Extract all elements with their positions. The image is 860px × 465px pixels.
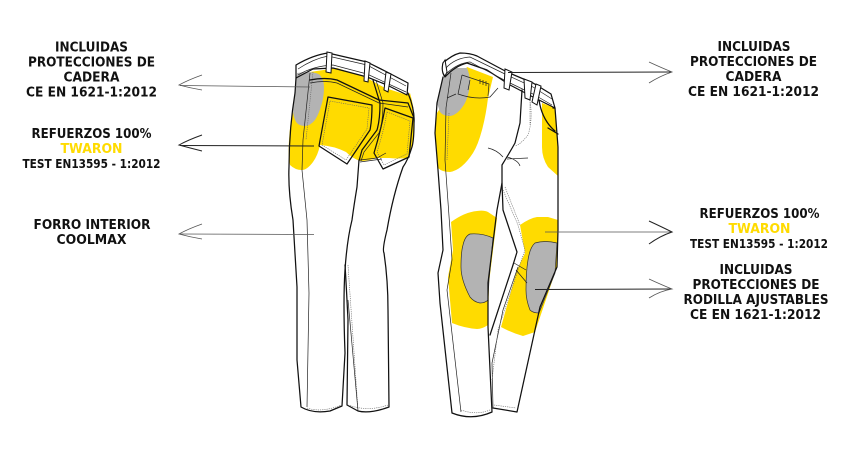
text: left hip protection	[26, 40, 157, 100]
arrow: left reinforcement callout	[179, 135, 314, 151]
front jeans silhouette	[435, 53, 558, 418]
back hip protector	[293, 72, 324, 126]
text: right hip protection: CE EN 1621-1:2012	[688, 85, 819, 100]
text: lining	[34, 218, 150, 248]
left knee yellow reinforcement	[448, 211, 497, 329]
arrow: left hip callout	[179, 75, 310, 90]
text: knee protection: CE EN 1621-1:2012	[690, 308, 821, 323]
text: lining: COOLMAX	[56, 233, 126, 248]
right knee yellow reinforcement	[501, 217, 558, 336]
text: left reinforcement: TEST EN13595 - 1:2012	[22, 157, 160, 171]
arrow: left lining callout	[179, 224, 314, 239]
gap between front legs	[488, 183, 517, 335]
text: left hip protection: CADERA	[64, 70, 120, 86]
back belt loops	[326, 52, 391, 92]
text: right hip protection	[688, 40, 819, 100]
text: right reinforcement	[690, 207, 828, 251]
front belt loops	[442, 60, 541, 105]
arrow: right reinforcement callout	[545, 221, 672, 244]
text: right hip protection: CADERA	[726, 70, 782, 85]
text: left reinforcement	[22, 127, 160, 171]
back jeans outlines	[289, 53, 414, 412]
front yellow side reinforcement	[542, 103, 558, 176]
front jeans outlines	[435, 53, 558, 417]
back yellow reinforcement	[289, 68, 414, 170]
text: knee protection: RODILLA AJUSTABLES	[684, 293, 828, 308]
arrow: right knee callout	[535, 279, 672, 298]
back view jeans	[289, 52, 414, 412]
text: left hip protection: INCLUIDAS	[55, 40, 128, 56]
text: right reinforcement: TEST EN13595 - 1:2012	[690, 237, 828, 251]
text: left hip protection: PROTECCIONES DE	[28, 56, 155, 70]
text: left reinforcement: REFUERZOS 100%	[32, 127, 152, 142]
front hip protector	[437, 68, 470, 116]
front view jeans	[435, 53, 558, 418]
text: knee protection: INCLUIDAS	[720, 263, 792, 278]
arrow: right hip callout	[508, 62, 672, 83]
right knee protector	[526, 242, 557, 313]
text: left reinforcement: TWARON	[60, 142, 122, 157]
text: right reinforcement: TWARON	[728, 222, 790, 237]
text: right reinforcement: REFUERZOS 100%	[700, 207, 820, 222]
text: right hip protection: INCLUIDAS	[718, 40, 790, 55]
text: left hip protection: CE EN 1621-1:2012	[26, 86, 157, 100]
text: right hip protection: PROTECCIONES DE	[690, 55, 817, 70]
text: knee protection: PROTECCIONES DE	[692, 278, 820, 293]
back jeans silhouette	[289, 53, 414, 412]
front yellow hip reinforcement	[435, 67, 493, 172]
left knee protector	[461, 234, 493, 303]
text: lining: FORRO INTERIOR	[34, 218, 150, 233]
text: knee protection	[684, 263, 828, 323]
